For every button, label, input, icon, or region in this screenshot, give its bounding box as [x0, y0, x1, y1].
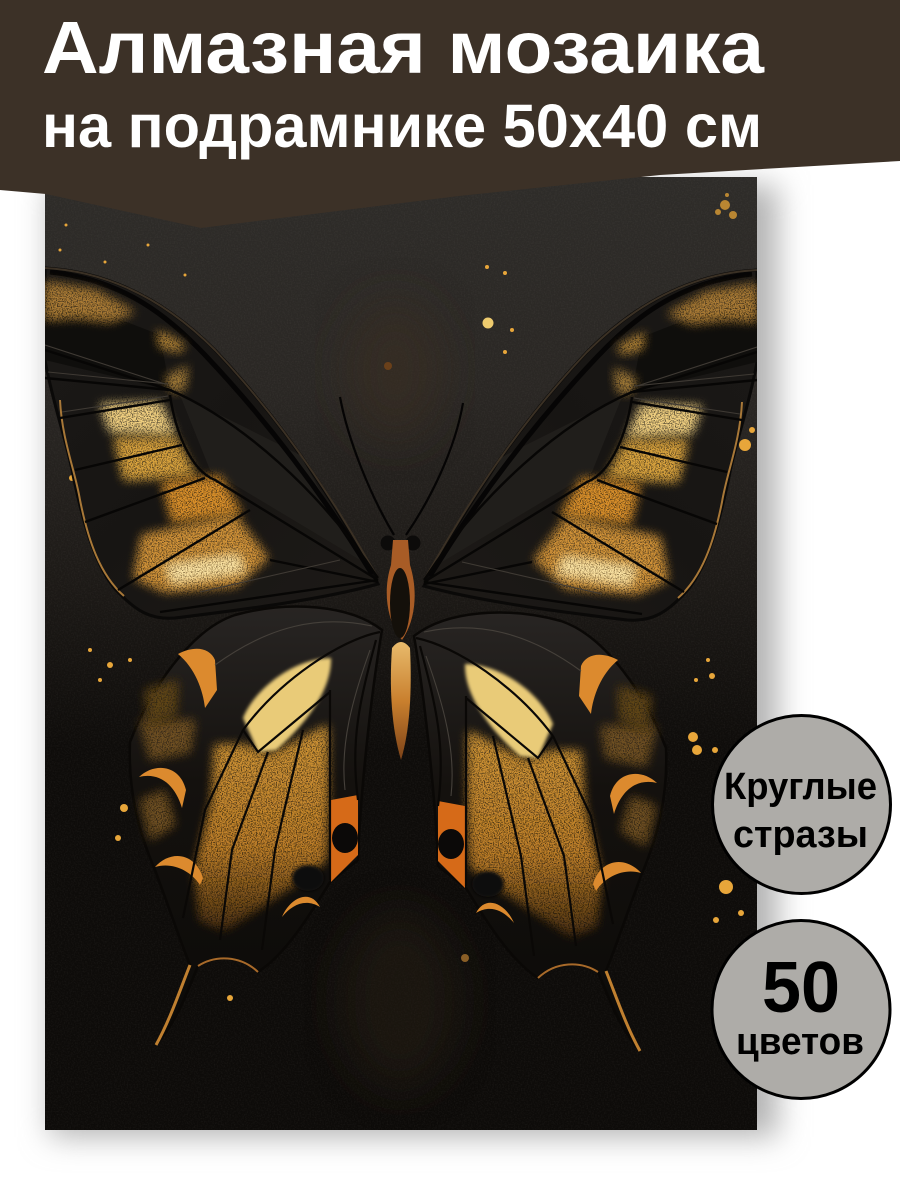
- butterfly body: [380, 536, 420, 760]
- right hind wing: [414, 613, 666, 1051]
- title: [42, 6, 765, 160]
- badge: 50 colours: цветов: [736, 1021, 864, 1063]
- butterfly: [45, 268, 757, 1051]
- right upper wing: [424, 270, 757, 620]
- badge: round rhinestones: Круглые: [724, 766, 877, 808]
- badge: 50 colours: 50: [762, 948, 840, 1028]
- gold splatter: [58, 193, 755, 1001]
- antennae: [340, 397, 463, 535]
- subtitle: на подрамнике 50х40 см: [42, 92, 762, 160]
- badge: 50 colours: [712, 920, 890, 1098]
- badge: round rhinestones: [712, 716, 890, 894]
- badge: round rhinestones: стразы: [733, 814, 868, 856]
- canvas painting: [45, 177, 757, 1130]
- title: Алмазная мозаика: [42, 6, 765, 89]
- left upper wing: [45, 268, 378, 618]
- left hind wing: [130, 607, 382, 1045]
- canvas shadow: [50, 185, 778, 1137]
- header banner: [0, 0, 900, 228]
